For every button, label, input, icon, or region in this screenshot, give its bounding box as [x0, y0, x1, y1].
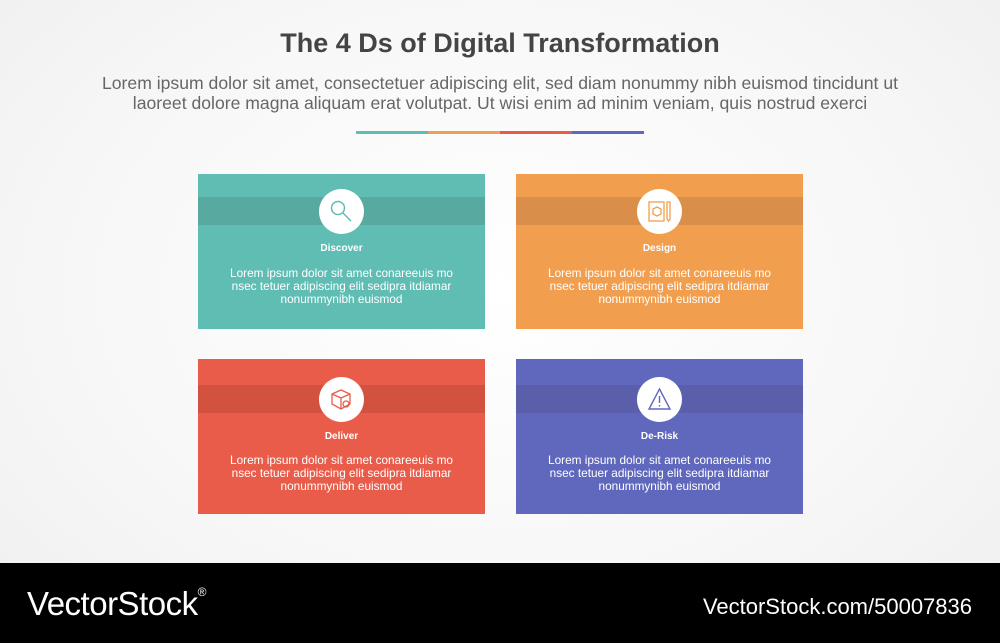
text: discover: nsec tetuer adipiscing elit sedipra itdiamar: [232, 279, 451, 293]
color divider: [356, 131, 644, 134]
text: deliver: [230, 453, 453, 493]
panel: deliver: [198, 359, 485, 514]
text: discover: Lorem ipsum dolor sit amet conareeuis mo: [230, 266, 453, 280]
text: deliver: Lorem ipsum dolor sit amet conareeuis mo: [230, 453, 453, 467]
text: discover: [230, 266, 453, 306]
icon: design: [637, 189, 682, 234]
heading: deliver: Deliver: [325, 431, 358, 442]
footer bar: [0, 563, 1000, 643]
text: deliver: nonummynibh euismod: [281, 479, 402, 493]
footer url: VectorStock.com/50007836: [703, 594, 972, 619]
text: de-risk: nonummynibh euismod: [599, 479, 720, 493]
subtitle: [102, 73, 898, 113]
text: design: nonummynibh euismod: [599, 292, 720, 306]
icon: magnifier: [319, 189, 364, 234]
text: design: Lorem ipsum dolor sit amet conareeuis mo: [548, 266, 771, 280]
panel: design: [516, 174, 803, 329]
icon: box: [319, 377, 364, 422]
panel: discover: [198, 174, 485, 329]
subtitle: laoreet dolore magna aliquam erat volutpat. Ut wisi enim ad minim veniam, quis nostrud exerci: [133, 93, 867, 113]
text: deliver: nsec tetuer adipiscing elit sedipra itdiamar: [232, 466, 451, 480]
title: The 4 Ds of Digital Transformation: [280, 28, 720, 58]
text: de-risk: Lorem ipsum dolor sit amet conareeuis mo: [548, 453, 771, 467]
heading: de-risk: De-Risk: [641, 431, 678, 442]
heading: discover: Discover: [320, 243, 363, 254]
text: de-risk: nsec tetuer adipiscing elit sedipra itdiamar: [550, 466, 769, 480]
text: design: nsec tetuer adipiscing elit sedipra itdiamar: [550, 279, 769, 293]
text: de-risk: [548, 453, 771, 493]
footer logo: VectorStock®: [27, 585, 206, 622]
icon: warning: [637, 377, 682, 422]
text: design: [548, 266, 771, 306]
panel: de-risk: [516, 359, 803, 514]
text: discover: nonummynibh euismod: [281, 292, 402, 306]
subtitle: Lorem ipsum dolor sit amet, consectetuer adipiscing elit, sed diam nonummy nibh euismod tincidunt ut: [102, 73, 898, 93]
heading: design: Design: [643, 243, 676, 254]
